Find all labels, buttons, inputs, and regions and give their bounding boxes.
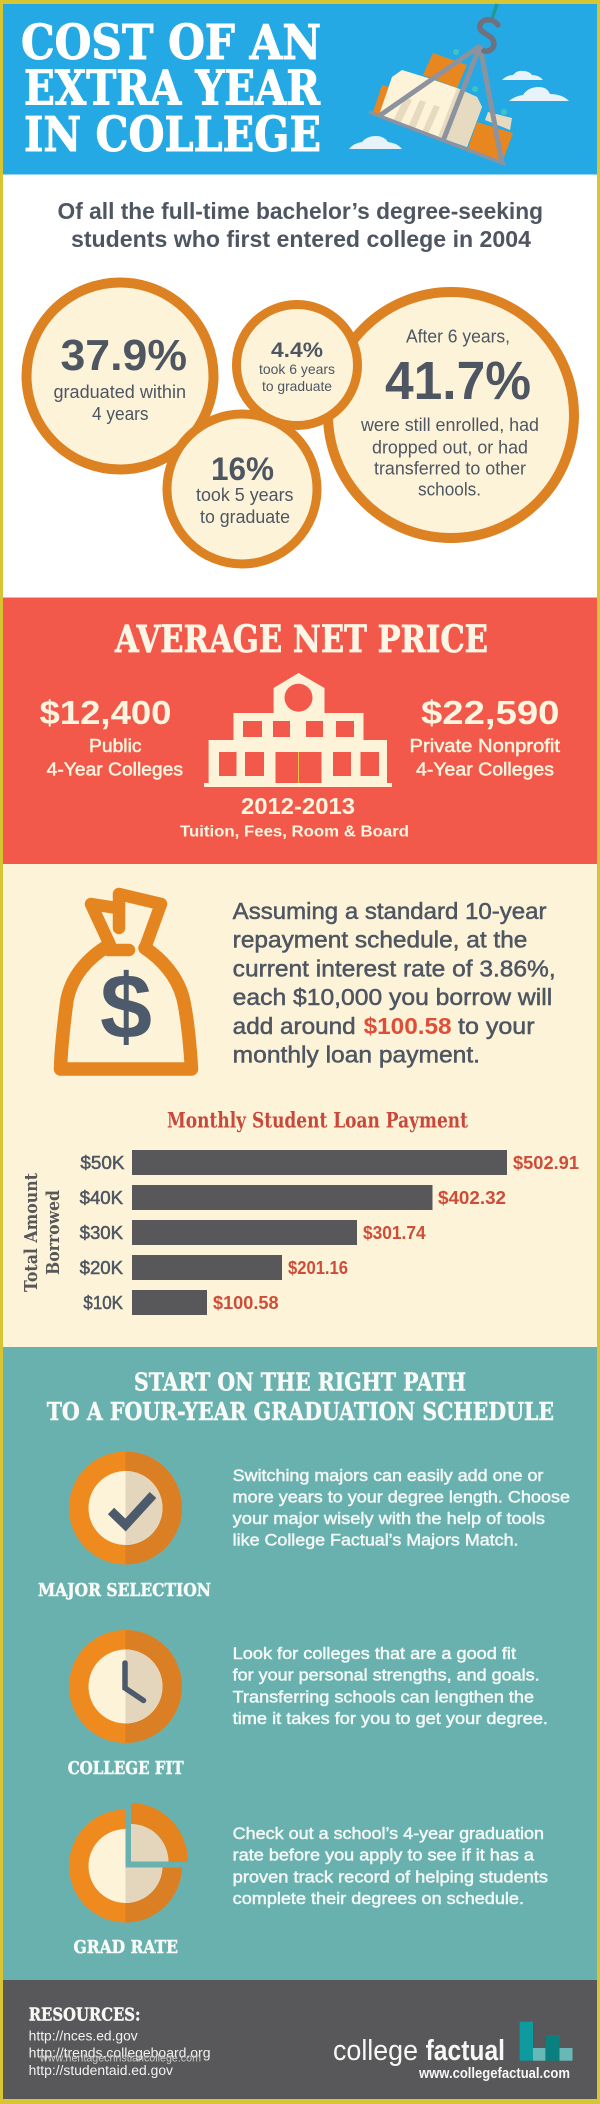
intro text: Of all the full-time bachelor’s degree-seeking (58, 198, 543, 224)
circle: 41.7 percent: dropped out, or had (372, 438, 528, 458)
text block: major selection (233, 1466, 570, 1550)
icon: college building lifted by crane hook (369, 4, 513, 164)
icon: cloud lower left (349, 136, 402, 149)
intro text: students who first entered college in 2004 (71, 226, 531, 252)
circle: 16 percent: took 5 years (196, 485, 294, 505)
value labels: $100.58 (213, 1293, 279, 1313)
stat: private nonprofit colleges: $22,590 (421, 694, 560, 731)
circle: 41.7 percent (328, 292, 574, 538)
circle: 16 percent: to graduate (200, 507, 290, 527)
circle: 41.7 percent: schools. (418, 480, 481, 500)
text block: grad rate: Check out a school’s 4-year graduation (233, 1824, 544, 1843)
text block: grad rate: rate before you apply to see if it has a (233, 1846, 535, 1865)
text block: college fit: Transferring schools can lengthen the (233, 1687, 534, 1706)
text block: repayment assumption: to your (458, 1013, 535, 1039)
circle: 4.4 percent: to graduate (262, 378, 332, 394)
bar chart: monthly student loan payment (21, 1108, 579, 1315)
panel: four-year graduation schedule (3, 1347, 597, 1980)
text block: college fit (233, 1644, 548, 1728)
category labels: $50K (80, 1153, 124, 1173)
text block: grad rate: proven track record of helping students (233, 1867, 548, 1886)
period and cost basis: Tuition, Fees, Room & Board (180, 824, 409, 841)
stat: public colleges: 4-Year Colleges (47, 760, 183, 780)
text block: major selection: like College Factual’s Majors Match. (233, 1531, 518, 1550)
text block: repayment assumption: repayment schedule, at the (233, 926, 527, 952)
circle: 37.9 percent (26, 282, 214, 470)
category labels: $20K (80, 1258, 123, 1278)
logo: college factual: factual (426, 2035, 505, 2067)
text block: repayment assumption (233, 898, 556, 1068)
circle: 41.7 percent: transferred to other (374, 458, 526, 478)
text block: college fit: time it takes for you to get your degree. (233, 1709, 548, 1728)
text block: major selection: Switching majors can easily add one or (233, 1466, 544, 1485)
panel: graduation statistics (3, 174, 597, 598)
value labels (213, 1153, 579, 1313)
period and cost basis (180, 793, 409, 841)
icon: cloud upper right (502, 71, 543, 80)
text block: repayment assumption: monthly loan payment. (233, 1042, 480, 1068)
stat: public colleges (40, 694, 183, 780)
chart title: Monthly Student Loan Payment (167, 1108, 468, 1133)
title: EXTRA YEAR (24, 60, 321, 116)
axis title: Borrowed (43, 1190, 64, 1275)
heading: START ON THE RIGHT PATH (134, 1368, 466, 1397)
heading: AVERAGE NET PRICE (114, 617, 488, 661)
circle: 4.4 percent: 4.4% (271, 339, 323, 362)
label: major selection: MAJOR SELECTION (38, 1580, 211, 1601)
resource links: www.heritagechristiancollege.com (39, 2053, 201, 2065)
circle: 16 percent (167, 414, 317, 564)
resources heading: RESOURCES: (29, 2005, 141, 2026)
text block: grad rate (233, 1824, 548, 1908)
title: IN COLLEGE (24, 107, 321, 163)
label: college fit: COLLEGE FIT (68, 1758, 184, 1779)
stat: private nonprofit colleges: Private Nonprofit (410, 736, 560, 756)
stat: public colleges: $12,400 (40, 694, 172, 731)
icon: money bag (60, 894, 192, 1069)
value labels: $502.91 (513, 1153, 579, 1173)
text block: repayment assumption: Assuming a standard 10-year (233, 898, 547, 924)
icon: check mark badge (69, 1452, 182, 1564)
text block: college fit: for your personal strengths, and goals. (233, 1666, 540, 1685)
category labels: $40K (80, 1188, 123, 1208)
panel: footer (3, 1980, 597, 2099)
resource links: http://studentaid.ed.gov (29, 2063, 173, 2078)
icon: college building (204, 673, 392, 787)
logo: college factual (333, 2022, 572, 2082)
value labels: $402.32 (438, 1188, 506, 1208)
value labels: $201.16 (288, 1258, 348, 1278)
text block: repayment assumption: each $10,000 you borrow will (233, 984, 552, 1010)
category labels: $10K (83, 1293, 123, 1313)
resource links: http://nces.ed.gov (29, 2029, 138, 2044)
circle: 37.9 percent: 4 years (92, 404, 148, 424)
text block: major selection: more years to your degree length. Choose (233, 1488, 570, 1507)
circle: 4.4 percent (236, 304, 358, 426)
axis title (21, 1172, 64, 1292)
bars (132, 1150, 507, 1315)
icon: pie chart badge (69, 1800, 192, 1922)
resource links: http://trends.collegeboard.org (29, 2045, 211, 2060)
heading (47, 1368, 554, 1426)
panel: loan repayment (3, 864, 597, 1347)
category labels: $30K (80, 1223, 123, 1243)
stat: private nonprofit colleges (410, 694, 560, 780)
stat: public colleges: Public (89, 736, 142, 756)
icon: cloud middle right (509, 87, 569, 101)
circle: 4.4 percent: took 6 years (259, 361, 335, 377)
circle: 41.7 percent: were still enrolled, had (360, 415, 539, 435)
text block: repayment assumption: add around (233, 1013, 356, 1039)
text block: repayment assumption: $100.58 (364, 1013, 452, 1039)
text block: major selection: your major wisely with the help of tools (233, 1509, 545, 1528)
intro text (58, 198, 543, 252)
circle: 37.9 percent: 37.9% (60, 331, 187, 380)
resource links (29, 2029, 211, 2078)
panel: average net price (3, 598, 597, 864)
value labels: $301.74 (363, 1223, 426, 1243)
text block: college fit: Look for colleges that are a good fit (233, 1644, 516, 1663)
text block: grad rate: complete their degrees on schedule. (233, 1889, 524, 1908)
title (21, 15, 321, 163)
circle: 37.9 percent: graduated within (54, 382, 186, 402)
logo: college factual: college (333, 2035, 418, 2067)
circle: 16 percent: 16% (211, 451, 274, 487)
logo: college factual: www.collegefactual.com (418, 2065, 570, 2082)
period and cost basis: 2012-2013 (241, 793, 355, 819)
icon: money bag: $ (100, 956, 152, 1058)
category labels (80, 1153, 124, 1313)
label: grad rate: GRAD RATE (74, 1937, 178, 1958)
title: COST OF AN (21, 15, 321, 71)
icon: clock badge (69, 1630, 182, 1743)
stat: private nonprofit colleges: 4-Year Colleges (416, 760, 554, 780)
panel: header (3, 4, 597, 174)
text block: repayment assumption: current interest rate of 3.86%, (233, 956, 556, 982)
axis title: Total Amount (21, 1172, 42, 1292)
circle: 41.7 percent: After 6 years, (406, 326, 510, 346)
circle: 41.7 percent: 41.7% (385, 351, 531, 411)
